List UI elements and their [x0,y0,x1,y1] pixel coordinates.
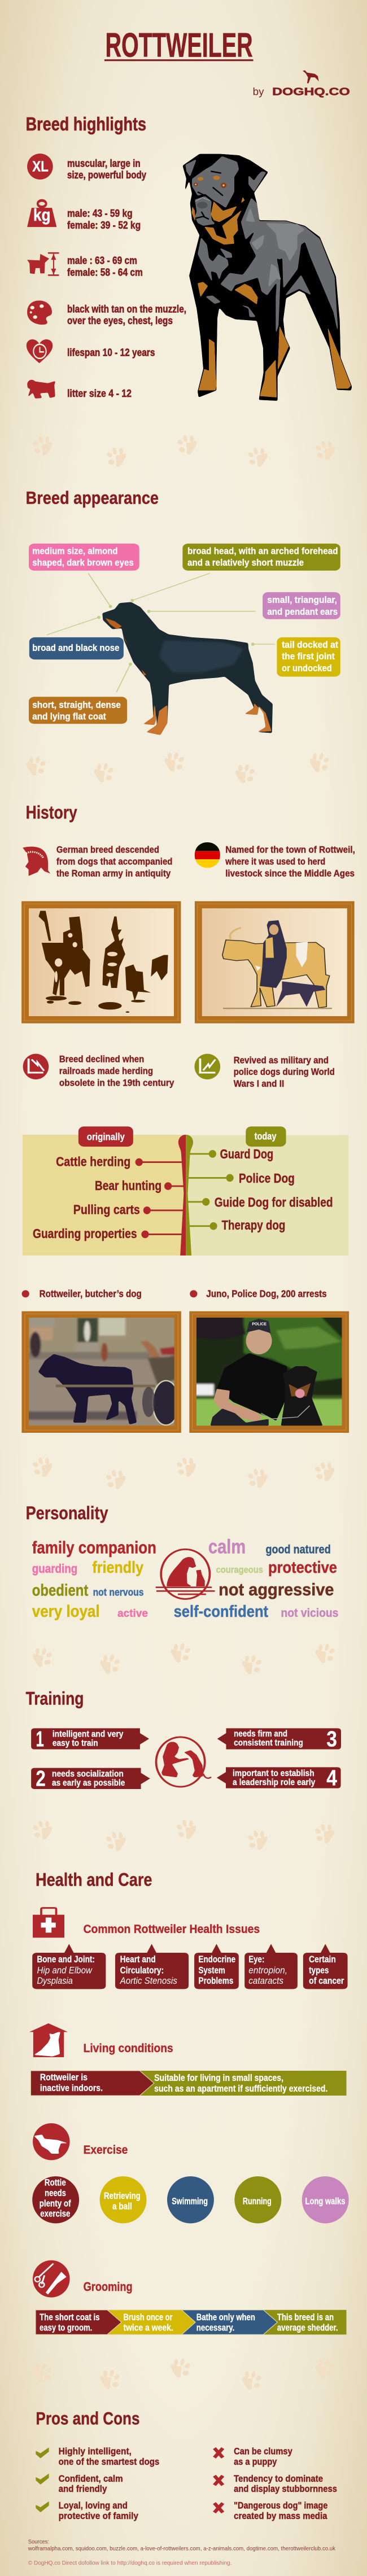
word cloud: not nervous [93,1587,144,1598]
training tip 1: intelligent and very [53,1729,123,1739]
training tip 2: 2 [36,1766,46,1791]
training tip 2: as early as possible [52,1778,125,1788]
callout: ears [263,592,340,619]
callout lines [47,573,275,692]
panel: personality [26,1503,338,1621]
training tip 3: 3 [326,1727,337,1751]
training tip 4 [217,1766,341,1791]
con 2: and display stubbornness [234,2484,337,2494]
pro 2: Confident, calm [59,2473,123,2483]
history item: decline: obsolete in the 19th century [59,1078,174,1088]
issue: heart: Heart and [120,1954,156,1965]
training tip 2 [31,1766,150,1791]
con 3: created by mass media [234,2511,327,2521]
item: pulling carts: Pulling carts [73,1202,140,1217]
callout: head: and a relatively short muzzle [187,557,304,568]
icon: dog house [29,2023,68,2057]
pill: originally [78,1126,133,1147]
panel: training [26,1688,341,1791]
exercise bubble: retrieving: Retrieving [104,2190,141,2201]
training tip 3 [217,1727,341,1751]
highlight: litter [27,380,132,399]
framed picture: man with ox and dog [195,901,355,1024]
exercise bubble: plenty: needs [45,2188,66,2198]
panel: living conditions [29,2023,347,2096]
exercise bubble: swimming [167,2176,214,2223]
issue: bone and joint [32,1944,106,1989]
history item: decline: Breed declined when [59,1054,144,1064]
process chevrons: The short coat is [40,2312,100,2323]
brand logo: DOGHQ.CO [272,86,350,98]
brand logo: by [253,86,264,98]
word cloud: active [117,1607,148,1619]
issue: eye: entropion, [248,1965,287,1975]
process chevrons: twice a week. [123,2323,173,2333]
issue: heart: Circulatory: [120,1965,164,1975]
exercise bubble: plenty [32,2176,79,2223]
highlight: size: XL [32,158,49,174]
heading: breed appearance: Breed appearance [26,488,159,508]
decorative paw prints [27,435,336,2390]
issue: cancer: of cancer [309,1975,344,1986]
word cloud: guarding [32,1562,77,1576]
panel: health issues [32,1869,348,1989]
sources: Sources: [28,2539,49,2545]
issue: endocrine [194,1944,239,1989]
sources [28,2539,336,2552]
con 2 [215,2473,337,2494]
highlight: height [27,253,143,278]
item: therapy dog [188,1218,285,1233]
pro 3: protective of family [59,2511,138,2521]
highlight: size: muscular, large in [67,158,141,169]
heading: personality: Personality [26,1503,108,1523]
heading: history: History [26,802,77,823]
framed pictures: butcher's dog and police dog [21,1311,349,1433]
exercise bubble: retrieving [100,2176,147,2223]
training tip 2: needs socialization [52,1769,124,1779]
issue: cancer: types [309,1965,329,1975]
pill: originally: originally [87,1131,125,1143]
framed picture: police officer and dog Juno [189,1311,349,1433]
history item: german flag [195,842,355,878]
title: ROTTWEILER [106,27,253,64]
exercise bubble: running [234,2176,281,2223]
training tip 1: easy to train [53,1738,98,1748]
issue: eye [244,1944,298,1989]
heading: breed highlights: Breed highlights [26,114,146,135]
heading: grooming: Grooming [84,2280,133,2294]
exercise bubble: retrieving: a ball [112,2201,132,2211]
history item: decline [23,1054,174,1088]
icon: dog and cat [156,1549,215,1599]
issue: endocrine: Endocrine [199,1954,235,1965]
history item: revival: Revived as military and [234,1055,329,1065]
word cloud: obedient [32,1581,88,1599]
framed picture: roman soldiers [21,901,181,1024]
issue: heart: Aortic Stenosis [120,1975,177,1986]
history item: german flag: where it was used to herd [225,856,325,867]
history item: roman origin [23,845,173,878]
callout: tail: or undocked [282,663,332,673]
callout: eyes: shaped, dark brown eyes [32,557,134,568]
highlight: size [27,154,147,181]
training tip 1 [31,1727,149,1751]
history item: roman origin: from dogs that accompanied [56,856,173,867]
right panel background [186,1135,348,1256]
pill: today: today [255,1131,277,1142]
callout: eyes [29,544,139,571]
issue: bone and joint: Bone and Joint: [37,1954,95,1965]
callout: nose: broad and black nose [32,642,119,653]
highlight: weight: female: 39 - 52 kg [67,219,141,231]
history item: revival: Wars I and II [234,1078,284,1089]
issue: endocrine: System [199,1965,225,1975]
process chevrons: Bathe only when [196,2312,255,2323]
caption: butcher's dog: Rottweiler, butcher’s dog [40,1288,142,1300]
word cloud [32,1536,338,1621]
item: guard dog [189,1147,273,1162]
heading: living conditions: Living conditions [84,2041,173,2055]
callout: nose [29,637,124,659]
highlight: colour: over the eyes, chest, legs [67,315,173,327]
history item: decline: railroads made herding [59,1066,153,1076]
word cloud: family companion [32,1538,156,1558]
callout: ears: small, triangular, [267,594,337,605]
banner: living conditions: Suitable for living in small spaces, [154,2072,283,2083]
pill: today [246,1126,286,1147]
highlight: colour [27,300,186,327]
callout: tail [277,637,340,677]
banner: living conditions: Rottweiler is [40,2072,88,2083]
process chevrons [36,2310,347,2334]
issue: heart [115,1944,189,1989]
con 1: Can be clumsy [234,2446,292,2456]
panel: header and breed highlights [26,27,350,399]
copyright note: © DogHQ.co Direct dofollow link to http://doghq.co is required when republishing. [28,2560,231,2566]
history item: revival [194,1054,335,1089]
item: bear hunting: Bear hunting [95,1179,161,1193]
callout: coat [29,697,127,724]
word cloud: protective [268,1558,337,1576]
item: cattle herding: Cattle herding [56,1154,130,1169]
callout: eyes: medium size, almond [32,546,118,556]
highlight: weight [27,200,141,231]
panel: breed appearance [26,488,340,735]
process chevrons: necessary. [196,2323,234,2333]
word cloud: courageous [216,1564,263,1575]
highlight: lifespan: lifespan 10 - 12 years [67,347,155,358]
pro 1 [36,2446,159,2467]
callout: coat: and lying flat coat [32,711,106,721]
word cloud: very loyal [32,1602,100,1621]
exercise bubble: swimming: Swimming [172,2195,208,2206]
banner: living conditions: inactive indoors. [40,2083,103,2093]
con 2: Tendency to dominate [234,2473,323,2483]
subheading: common health issues: Common Rottweiler Health Issues [84,1922,260,1936]
highlight: height: male : 63 - 69 cm [67,255,137,266]
heading: exercise: Exercise [84,2143,128,2157]
heading: pros and cons: Pros and Cons [36,2409,139,2429]
word cloud: calm [208,1536,246,1558]
caption: butcher's dog [22,1288,142,1300]
issue: bone and joint: Dysplasia [37,1975,73,1986]
training tip 4: 4 [326,1766,337,1791]
callout: coat: short, straight, dense [32,699,121,710]
process chevrons: easy to groom. [40,2323,92,2333]
pro 2 [36,2473,123,2494]
highlight: litter: litter size 4 - 12 [67,387,132,399]
training tip 1: 1 [36,1727,44,1751]
history item: roman origin: German breed descended [56,845,159,855]
word cloud: not vicious [281,1606,338,1620]
word cloud: self-confident [174,1602,268,1620]
pro 3: Loyal, loving and [59,2500,128,2511]
heading: training: Training [26,1688,84,1708]
highlight: size: size, powerful body [67,169,147,181]
icon: first aid kit [33,1908,64,1938]
pro 1: one of the smartest dogs [59,2456,159,2467]
callout: ears: and pendant ears [267,606,338,617]
pro 2: and friendly [59,2484,107,2494]
item: police dog: Police Dog [239,1171,295,1186]
icon: woman training dog [156,1737,211,1787]
item: police dog [188,1171,295,1186]
callout: head [182,544,340,571]
process chevrons: Brush once or [123,2312,173,2323]
con 3: "Dangerous dog" image [234,2500,327,2511]
pro 1: Highly intelligent, [59,2446,132,2456]
panel: pros and cons [28,2409,337,2566]
item: guard dog: Guard Dog [220,1147,273,1162]
central stem [178,1135,193,1256]
history item: roman origin: the Roman army in antiquity [56,868,171,878]
issue: eye: cataracts [248,1975,283,1986]
issue: bone and joint: Hip and Elbow [37,1965,93,1975]
item: therapy dog: Therapy dog [222,1218,285,1233]
photo: rottweiler in profile [102,602,273,735]
training tip 4: important to establish [233,1768,314,1778]
left panel background [23,1135,186,1256]
exercise bubble: long walks: Long walks [305,2195,345,2206]
con 3 [215,2500,327,2521]
training tip 3: needs firm and [234,1729,287,1739]
word cloud: friendly [92,1558,143,1576]
issue: cancer [303,1944,348,1989]
banner: living conditions [30,2071,347,2096]
panel: history [21,802,355,1089]
highlight: height: female: 58 - 64 cm [67,266,143,278]
panel: originally vs today [22,1126,348,1300]
exercise bubble: plenty: plenty of [40,2198,71,2208]
caption: juno police dog: Juno, Police Dog, 200 arrests [206,1288,327,1300]
exercise bubble: plenty: exercise [40,2208,70,2219]
icon: scissors and comb [33,2260,70,2298]
highlight: colour: black with tan on the muzzle, [67,303,186,315]
training tip 4: a leadership role early [233,1777,315,1787]
training tip 3: consistent training [234,1738,303,1748]
framed picture: police officer and dog Juno: POLICE [252,1322,266,1326]
callout: tail: the first joint [282,651,335,662]
word cloud: good natured [266,1543,331,1556]
framed picture: butcher's dog painting [21,1311,181,1433]
brand logo [253,70,350,98]
heading: health and care: Health and Care [36,1869,152,1890]
icon: running dog [33,2123,70,2160]
highlight: weight: kg [33,205,51,225]
panel: grooming [33,2260,347,2334]
illustration: standing rottweiler [182,154,352,401]
callout: tail: tail docked at [282,640,338,650]
caption: juno police dog [190,1288,327,1300]
highlight: weight: male: 43 - 59 kg [67,207,133,219]
item: guide dog [187,1195,333,1210]
exercise bubble: long walks [302,2176,349,2223]
pro 3 [36,2500,138,2521]
process chevrons: This breed is an [277,2312,334,2323]
process chevrons: average shedder. [277,2323,338,2333]
issue: eye: Eye: [248,1954,264,1965]
highlight: lifespan [27,339,155,363]
panel: exercise [32,2123,349,2223]
con 1: as a puppy [234,2456,277,2467]
exercise bubble: running: Running [243,2195,272,2206]
issue: cancer: Certain [309,1954,336,1965]
con 1 [215,2446,292,2467]
exercise bubble: plenty: Rottie [45,2177,66,2188]
issue: endocrine: Problems [199,1975,233,1986]
item: guarding properties: Guarding properties [33,1227,137,1241]
